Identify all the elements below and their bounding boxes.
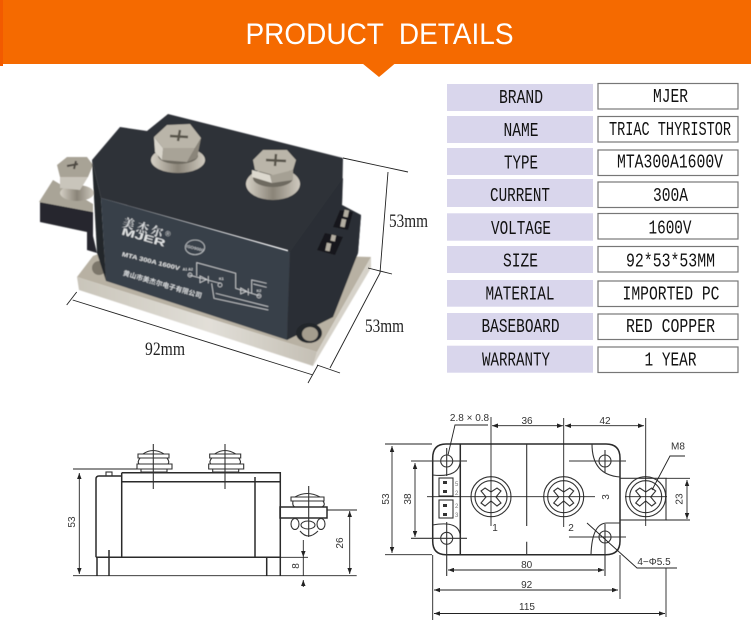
terminal block pins: [317, 210, 353, 255]
label 2.8x0.8: 2.8 × 0.8: [450, 413, 490, 424]
label 1: 1: [492, 523, 498, 534]
model text: MTA 300A 1600V: [121, 252, 180, 272]
top screw right: [209, 444, 244, 489]
certification logo: ISO9000: [186, 243, 205, 253]
row: type: [447, 148, 738, 176]
row: voltage: [447, 213, 738, 241]
row: type: TYPE: [504, 152, 538, 174]
row: warranty: 1 YEAR: [644, 349, 696, 371]
brand name: ®: [164, 229, 172, 239]
row: name: NAME: [504, 120, 538, 142]
label 92: 92: [521, 580, 533, 591]
row: voltage: VOLTAGE: [491, 218, 551, 240]
brand name: MJER: [120, 227, 166, 250]
circuit schematic: [183, 263, 268, 310]
row: current: CURRENT: [490, 185, 550, 207]
top view dimensions: [385, 417, 690, 620]
label 4-Φ5.5: 4−Φ5.5: [637, 557, 671, 568]
row: warranty: [447, 346, 738, 373]
row: material: [447, 280, 738, 307]
connector pins: 5: [455, 482, 459, 488]
company text: 黄山市美杰尔电子有限公司: [122, 267, 204, 300]
row: name: [447, 116, 738, 143]
row: brand: BRAND: [499, 87, 543, 109]
connector pins: 3: [455, 513, 459, 519]
row: material: IMPORTED PC: [622, 283, 720, 305]
row: voltage: 1600V: [648, 218, 692, 240]
top view technical drawing: [381, 413, 690, 620]
brand name: [120, 214, 172, 250]
row: size: 92*53*53MM: [626, 250, 715, 272]
label 80: 80: [521, 560, 533, 571]
module body: [92, 114, 361, 343]
title: PRODUCT DETAILS: [246, 18, 514, 51]
screw terminal 2: [246, 150, 300, 200]
row: warranty: WARRANTY: [482, 349, 550, 371]
circuit schematic: K2: [257, 289, 261, 293]
label 53: 53: [67, 516, 78, 528]
row: size: SIZE: [503, 251, 538, 273]
label 3: 3: [601, 494, 612, 500]
circuit schematic: K1: [219, 277, 224, 281]
top screw left: [137, 444, 172, 489]
label 8: 8: [291, 563, 302, 569]
row: baseboard: [447, 313, 738, 340]
row: current: [447, 179, 738, 208]
dimension lines on photo: [67, 158, 408, 383]
specification table: [447, 84, 738, 373]
label 36: 36: [521, 416, 533, 427]
certification logo: [185, 240, 205, 255]
screw terminal 1: [151, 124, 205, 173]
row: type: MTA300A1600V: [617, 152, 723, 174]
module outline: [433, 444, 620, 555]
label 42: 42: [599, 416, 611, 427]
side view technical drawing: [67, 444, 357, 587]
side view dimensions: [73, 469, 357, 587]
row: brand: [447, 84, 738, 111]
terminal screw 1: [471, 477, 511, 517]
connector pins: 2: [455, 504, 459, 510]
label M8: M8: [671, 442, 685, 452]
label 53: 53: [381, 493, 392, 505]
row: material: MATERIAL: [486, 283, 554, 305]
circuit schematic: A1 A2: [183, 268, 193, 272]
header banner: [0, 0, 751, 77]
base plate: [77, 250, 371, 366]
front label: [120, 214, 268, 310]
side tab with M8 screw: [620, 477, 666, 520]
row: size: [447, 246, 738, 273]
brand name: 美杰尔: [121, 214, 166, 242]
left terminal tab: [39, 157, 97, 253]
label 2: 2: [568, 523, 574, 534]
mounting holes: [411, 448, 626, 576]
product photo: thyristor module: [39, 114, 371, 366]
connector pins: 2: [455, 491, 459, 497]
dimension label 53mm height: 53mm: [389, 212, 429, 232]
dimension label 53mm depth: 53mm: [365, 317, 405, 337]
label 115: 115: [519, 602, 535, 613]
row: baseboard: BASEBOARD: [482, 316, 560, 338]
module outline: [96, 472, 280, 576]
dimension label 92mm: 92mm: [145, 340, 186, 360]
label 26: 26: [335, 537, 346, 549]
side terminal screw: [280, 486, 327, 537]
row: baseboard: RED COPPER: [626, 316, 715, 338]
mounting hole front right: [296, 323, 322, 343]
terminal screw 2: [544, 477, 584, 517]
connector pins: [439, 478, 459, 519]
label 38: 38: [403, 493, 414, 505]
row: current: 300A: [653, 185, 688, 207]
row: brand: MJER: [653, 86, 688, 108]
label 23: 23: [674, 493, 686, 505]
